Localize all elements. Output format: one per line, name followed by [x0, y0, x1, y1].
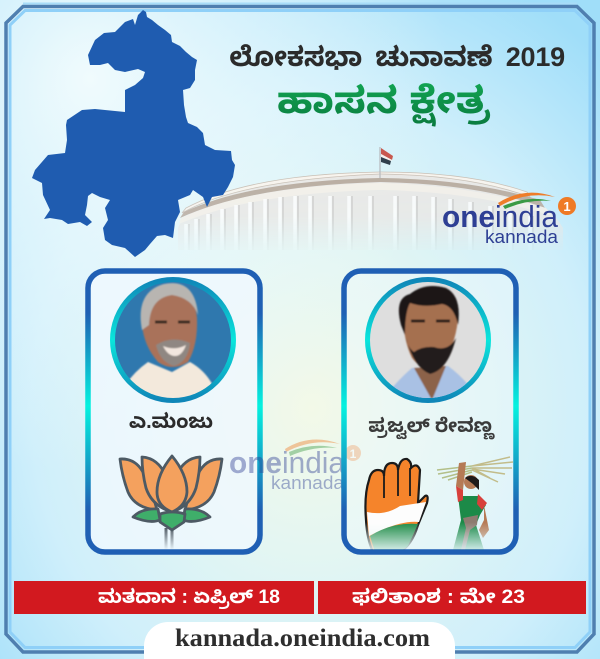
banner: polling date: [14, 581, 314, 614]
photo: A. Manju: [112, 280, 234, 410]
panel: candidate A. Manju: [88, 271, 260, 552]
footer website pill: [144, 622, 455, 659]
banner: result date: [318, 581, 586, 614]
subtitle: constituency name: ಹಾಸನ ಕ್ಷೇತ್ರ: [277, 80, 491, 127]
candidate name: ಎ.ಮಂಜು: [129, 411, 213, 433]
watermark logo: [229, 440, 361, 493]
logo: oneindia kannada: oneindia: [442, 199, 559, 234]
logo: oneindia kannada: [442, 193, 576, 247]
logo: oneindia kannada: 1: [563, 199, 571, 214]
watermark logo: oneindia: [229, 445, 346, 480]
panel: candidate Prajwal Revanna: [344, 271, 516, 552]
watermark logo: 1: [350, 447, 357, 461]
icon: Congress hand: [365, 459, 428, 552]
map of Hassan constituency: [32, 10, 235, 257]
banner: polling date: ಮತದಾನ : ಏಪ್ರಿಲ್ 18: [98, 587, 280, 609]
parliament building: [178, 172, 563, 250]
banner: result date: ಫಲಿತಾಂಶ : ಮೇ 23: [352, 587, 525, 608]
footer website pill: kannada.oneindia.com: [175, 625, 430, 652]
icon: BJP lotus: [120, 456, 222, 550]
logo: oneindia kannada: kannada: [485, 227, 559, 247]
photo: Prajwal Revanna: [368, 280, 488, 410]
watermark logo: kannada: [271, 473, 345, 493]
icon: JD(S) farmer woman with sheaf: [437, 457, 513, 550]
candidate name: ಪ್ರಜ್ವಲ್ ರೇವಣ್ಣ: [368, 416, 495, 440]
flag: [380, 147, 393, 178]
title: election heading: ಲೋಕಸಭಾ ಚುನಾವಣೆ 2019: [229, 42, 565, 72]
